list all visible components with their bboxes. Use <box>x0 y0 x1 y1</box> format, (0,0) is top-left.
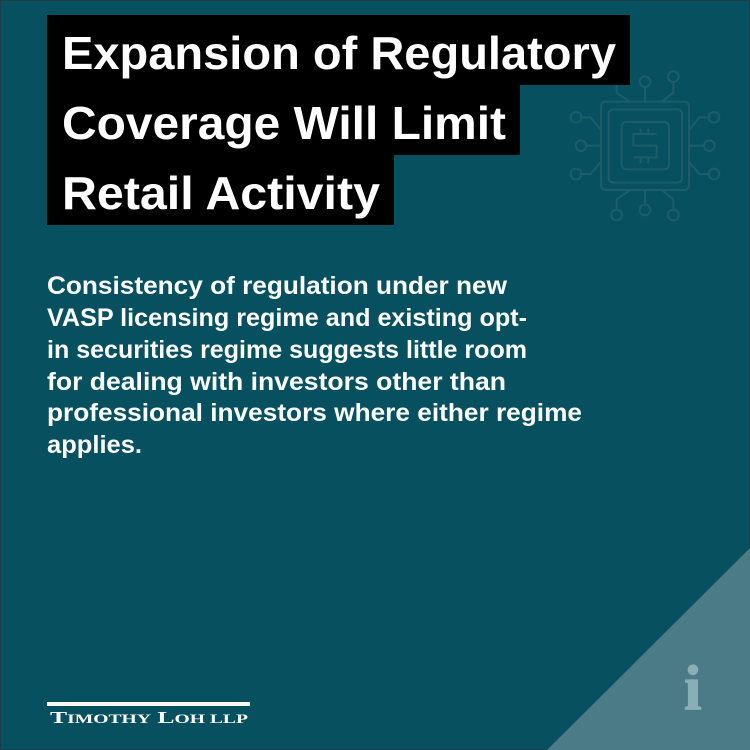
title line 1 text: Expansion of Regulatory <box>62 27 616 79</box>
body text: Consistency of regulation under new <box>47 272 508 300</box>
body text: applies. <box>47 431 142 459</box>
title line 3 text: Retail Activity <box>62 167 380 219</box>
logo: Timothy Loh LLP <box>47 702 250 727</box>
body text <box>47 272 582 459</box>
corner triangle <box>547 548 750 750</box>
body text: for dealing with investors other than <box>47 368 506 396</box>
body text: VASP licensing regime and existing opt- <box>47 304 527 332</box>
body text: professional investors where either regime <box>47 399 582 427</box>
logo: Timothy Loh LLP: T IMOTHY L OH LLP <box>50 708 248 727</box>
title line 1 highlight <box>47 15 630 85</box>
title <box>47 15 630 225</box>
icon: crypto chip with dollar sign <box>571 71 719 220</box>
icon: information letter: i <box>684 653 702 723</box>
body text: in securities regime suggests little room <box>47 336 527 364</box>
title line 3 highlight <box>47 155 394 225</box>
title line 2 text: Coverage Will Limit <box>62 97 506 149</box>
title line 2 highlight <box>47 85 520 155</box>
